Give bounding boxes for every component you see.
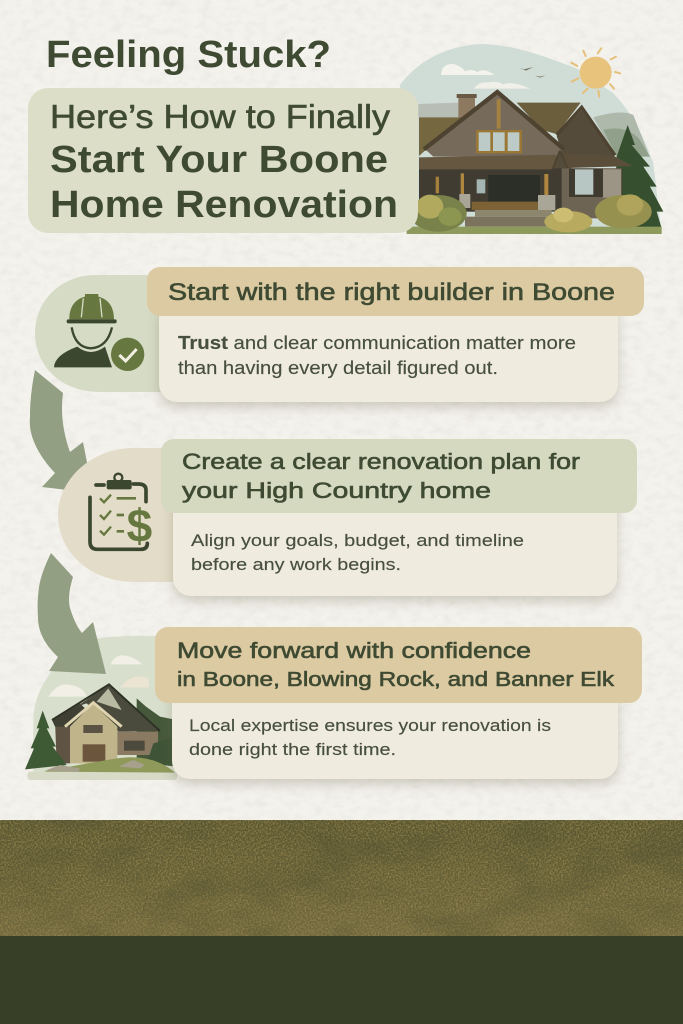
step 1 icon backdrop: [35, 275, 170, 392]
step 3 heading: in Boone, Blowing Rock, and Banner Elk: [177, 669, 615, 691]
illustration: mountain house with sun: [400, 44, 663, 234]
title: Feeling Stuck: Feeling Stuck?: [46, 34, 331, 76]
step 1 description: Trust and clear communication matter more: [178, 333, 576, 353]
step 3 description: done right the first time.: [189, 740, 396, 759]
step 1 description: than having every detail figured out.: [178, 358, 498, 378]
icon: builder with check: [54, 294, 144, 371]
step 1 header bar: [147, 267, 644, 316]
arrow: step 1 to step 2: [30, 370, 93, 493]
icon: clipboard with dollar sign: [90, 474, 152, 552]
subtitle line 1: Here’s How to Finally: [50, 98, 391, 135]
step 2 icon backdrop: [58, 448, 180, 582]
shrubs: [410, 194, 652, 232]
tree: [613, 125, 663, 228]
subtitle line 2: Start Your Boone: [50, 139, 388, 181]
dark green footer band: [0, 936, 683, 1024]
illustration: suburban house: [25, 636, 177, 780]
subtitle line 3: Home Renovation: [50, 184, 398, 226]
step 3 description: [189, 716, 551, 759]
olive textured band: [0, 820, 683, 936]
step 1 description: [178, 333, 576, 378]
step 2 description: before any work begins.: [191, 555, 401, 574]
tree: [25, 711, 67, 769]
step 1 heading: Start with the right builder in Boone: [168, 279, 615, 306]
step 2 description: Align your goals, budget, and timeline: [191, 531, 524, 550]
step 3 description: Local expertise ensures your renovation is: [189, 716, 551, 735]
step 2 heading: your High Country home: [182, 478, 491, 503]
step 2 description: [191, 531, 524, 574]
step 3 body card: [172, 680, 618, 779]
step 2 header bar: [161, 439, 637, 513]
step 1 body card: [159, 300, 618, 402]
arrow: step 2 to step 3: [38, 553, 106, 674]
step 2 heading: Create a clear renovation plan for: [182, 449, 580, 474]
step 3 heading: [177, 638, 615, 691]
step 2 heading: [182, 449, 580, 503]
cloud: [441, 64, 494, 75]
step 2 body card: [173, 490, 617, 596]
title panel: [28, 88, 418, 233]
icon: clipboard with dollar sign: $: [127, 500, 152, 552]
step 3 header bar: [155, 627, 642, 703]
sun: [571, 48, 620, 97]
step 3 heading: Move forward with confidence: [177, 638, 531, 663]
